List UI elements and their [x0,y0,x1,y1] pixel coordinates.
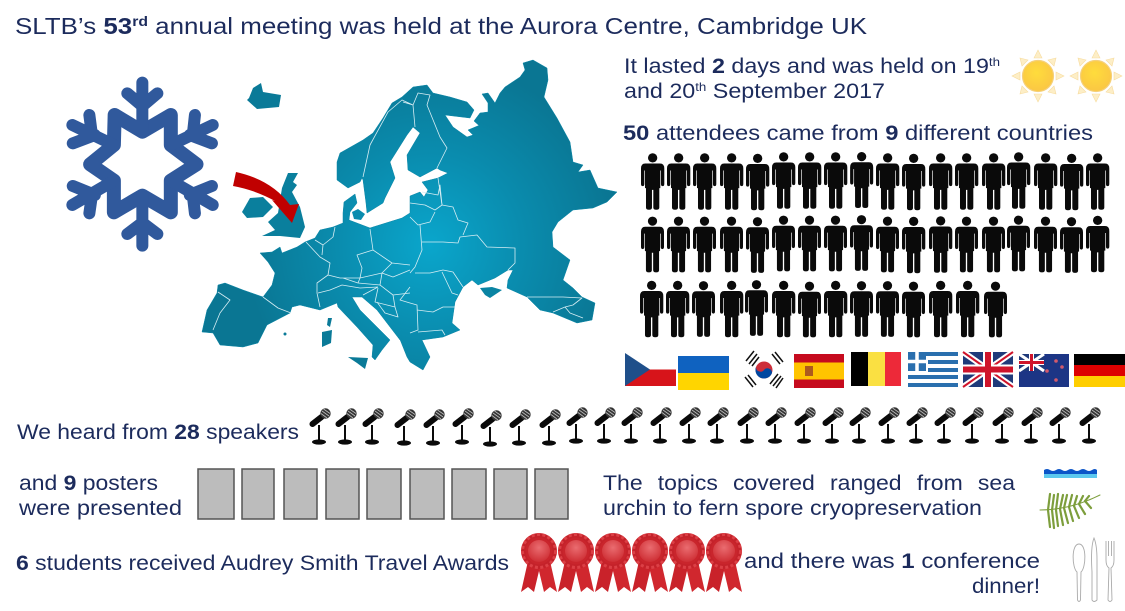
title: SLTB’s 53 [15,13,129,39]
icon: 28 microphones [312,407,1101,447]
Sardinia [322,330,332,347]
flag: Spain [794,354,844,388]
Ireland [242,197,273,218]
text: dates: September 2017 [706,80,885,103]
text: dates: th [695,80,706,94]
icon: 6 rosettes [521,533,742,592]
icon: cutlery [1073,538,1114,602]
text: topics: The topics covered ranged from sea [603,472,1015,495]
text: posters: were presented [18,497,182,520]
flag: Ukraine [678,356,729,390]
text: dinner [744,550,1040,598]
Iceland [247,83,281,109]
flag: Czech Republic [625,353,676,386]
text: topics: urchin to fern spore cryopreservation [603,497,982,520]
flags [625,351,1125,390]
icon: 50 attendees [640,152,1109,337]
text: attendees: 50 attendees came from 9 different countries [623,122,1093,145]
text: dinner: dinner! [972,575,1040,598]
map of Europe [202,60,617,370]
text: dates: th [989,55,1000,69]
text: topics [603,472,1015,520]
text: travel awards: 6 students received Audrey Smith Travel Awards [16,552,509,575]
text: speakers: We heard from 28 speakers [17,421,299,444]
flag: Belgium [851,352,901,386]
icon: fern [1040,494,1100,528]
flag: Germany [1074,354,1125,387]
icon: sea water [1044,469,1097,478]
title: rd [132,13,148,29]
arrow: to Cambridge [233,172,299,223]
flag: United Kingdom [963,352,1013,387]
icon: two suns [1012,50,1122,102]
text: dinner: and there was 1 conference [744,550,1040,573]
Danish islands [352,209,365,220]
text: dates: and 20 [624,80,688,103]
country borders [213,93,583,335]
text: dates [624,55,1000,103]
Sicily [348,357,368,369]
Great Britain [262,173,305,238]
Crimea [480,287,502,298]
Corsica [327,318,332,327]
Balearic islands [284,332,286,336]
text: posters: and 9 posters [19,472,158,495]
text: posters [18,472,182,520]
icon: 9 posters [198,469,568,519]
text: dates: It lasted 2 days and was held on 19 [624,55,963,78]
title: annual meeting was held at the Aurora Centre, Cambridge UK [148,13,868,39]
flag: South Korea [745,351,783,388]
flag: New Zealand [1019,354,1069,387]
icon: snowflake [72,83,213,246]
flag: Greece [908,352,958,387]
